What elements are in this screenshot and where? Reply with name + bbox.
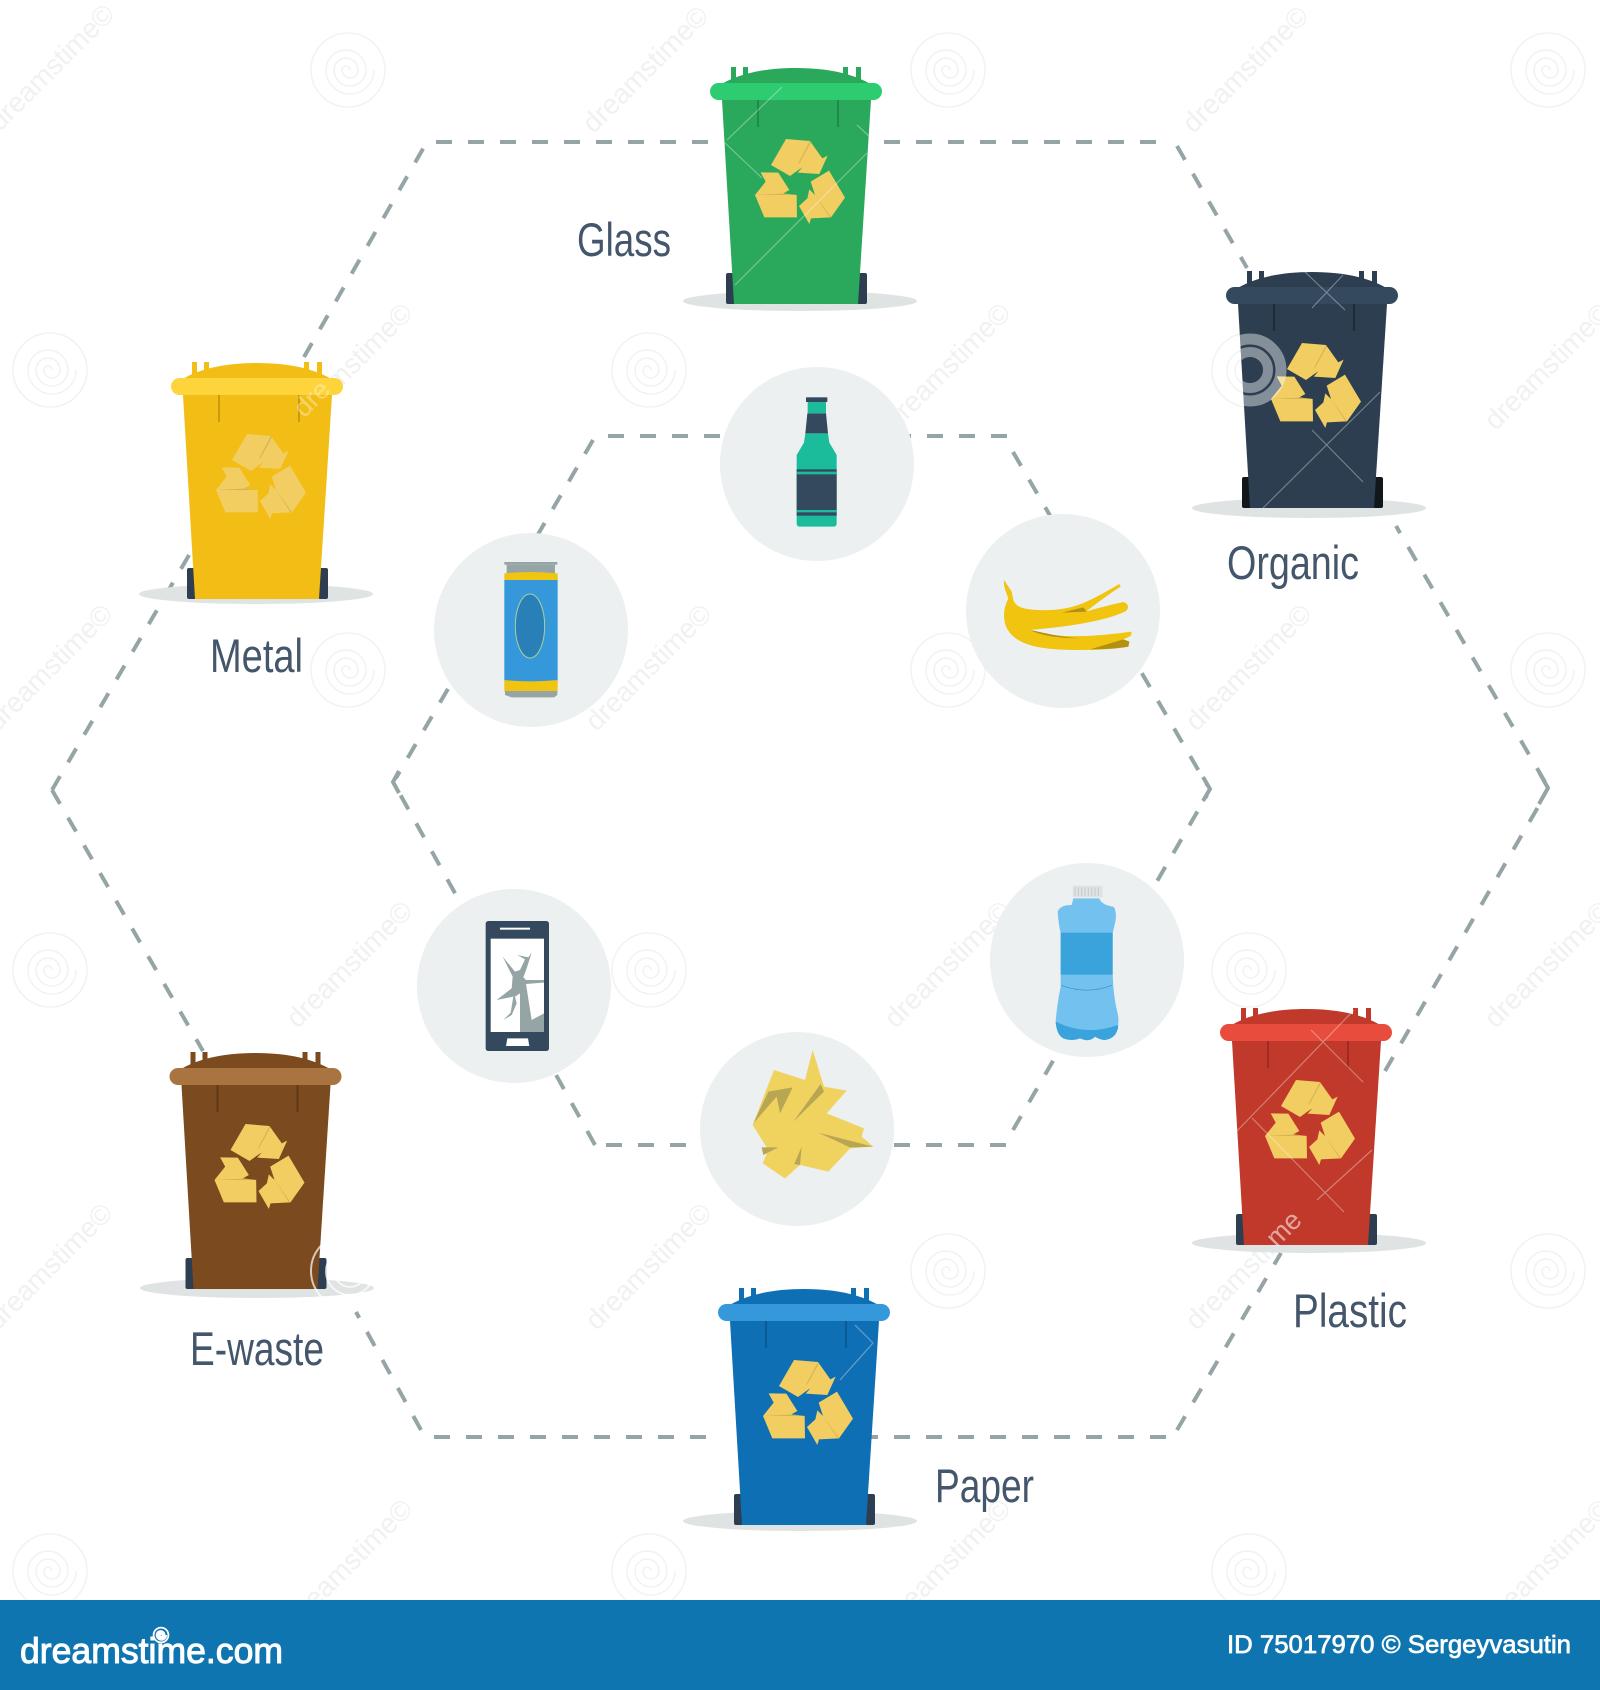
bin: glass bbox=[683, 67, 917, 311]
text: dreamstime© bbox=[878, 1493, 1017, 1632]
label: organic: Organic bbox=[1227, 536, 1359, 589]
logo spiral bbox=[154, 1628, 168, 1642]
item: crumpled paper bbox=[700, 1032, 894, 1226]
item: glass bottle bbox=[720, 367, 914, 561]
logo text: dreamstime.com bbox=[20, 1630, 283, 1671]
text: dreamstime© bbox=[579, 1197, 718, 1336]
label: metal: Metal bbox=[210, 629, 303, 682]
text: dreamstime© bbox=[280, 297, 419, 436]
bin: paper bbox=[683, 1288, 917, 1531]
text: dreamstime© bbox=[579, 598, 718, 737]
item: plastic bottle bbox=[990, 863, 1184, 1057]
outer dashed hexagon bbox=[52, 142, 1548, 1437]
bin: organic bbox=[1192, 271, 1426, 518]
watermark over bins: dre bbox=[287, 374, 336, 423]
bin: plastic bbox=[1192, 1008, 1426, 1253]
image id and author: ID 75017970 © Sergeyvasutin bbox=[1227, 1631, 1571, 1659]
bin: metal bbox=[139, 362, 373, 604]
item: drink can bbox=[434, 533, 628, 727]
text: dreamstime© bbox=[1179, 598, 1318, 737]
label: paper: Paper bbox=[935, 1459, 1034, 1512]
text: dreamstime© bbox=[878, 895, 1017, 1034]
item: banana peel bbox=[966, 514, 1160, 708]
text: dreamstime© bbox=[576, 0, 715, 139]
inner dashed hexagon bbox=[393, 436, 1210, 1145]
label: glass: Glass bbox=[577, 213, 671, 266]
text: dreamstime© bbox=[878, 297, 1017, 436]
text: dreamstime© bbox=[1179, 1197, 1318, 1336]
bin: e-waste bbox=[140, 1052, 374, 1298]
label: e-waste: E-waste bbox=[190, 1322, 324, 1375]
text: dreamstime© bbox=[280, 895, 419, 1034]
item: broken smartphone bbox=[417, 889, 611, 1083]
text: dreamstime© bbox=[1176, 0, 1315, 139]
watermark over bins bbox=[287, 374, 1308, 1308]
watermark over bins: me bbox=[1260, 1205, 1308, 1253]
text: dreamstime© bbox=[280, 1493, 419, 1632]
label: plastic: Plastic bbox=[1293, 1284, 1407, 1337]
footer bar bbox=[0, 1600, 1600, 1690]
